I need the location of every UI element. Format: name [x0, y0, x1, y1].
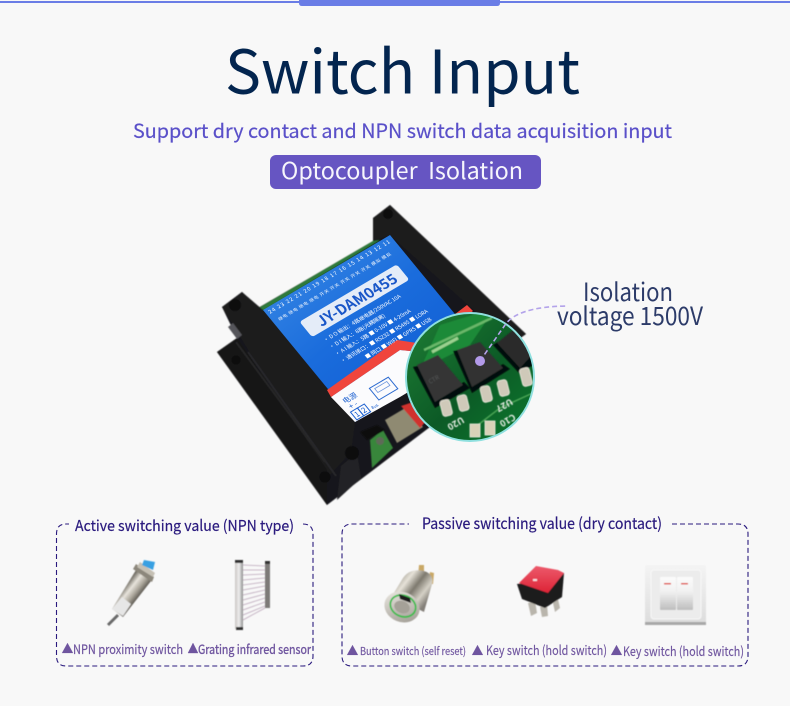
- power terminal print: 8us: [370, 403, 380, 411]
- power terminal print: 2: [359, 405, 370, 416]
- callout: isolation voltage: [557, 273, 704, 333]
- chip shadows: [413, 342, 540, 408]
- terminal number strip: 24 23 22 21 20 19 18 17 16 15 14 13 12 11: [266, 238, 392, 315]
- callout: isolation voltage: Isolation: [583, 273, 673, 309]
- channel labels: 继电 继电 继电 继电 开关 开关 开关 开关 开关 模拟 模拟: [276, 251, 393, 322]
- callout leader line: [475, 306, 566, 366]
- label printed plane: [266, 238, 448, 384]
- model name: JY-DAM0455: [312, 269, 402, 331]
- caption: button switch: Button switch (self reset): [360, 643, 466, 659]
- subtitle: Support dry contact and NPN switch data acquisition input: [133, 115, 673, 144]
- title: Switch Input: [225, 24, 580, 112]
- device terminal and connectors: [360, 402, 427, 468]
- caption: key switch 2: Key switch (hold switch): [623, 641, 744, 660]
- board silkscreen: U27: [494, 396, 515, 416]
- icon: wall switch: [645, 565, 706, 625]
- panel: passive switching value: [342, 512, 748, 666]
- specification list: • D I 输入：8路(光耦隔离): [327, 312, 387, 351]
- icon: NPN proximity switch: [108, 560, 155, 625]
- device black housing: [217, 205, 526, 505]
- product photo: JY-DAM0455 module: [217, 205, 566, 505]
- power terminal print: + -: [346, 399, 361, 412]
- callout: isolation voltage: voltage 1500V: [557, 297, 704, 333]
- specification list: • 通讯接口：■ RS232 ■ RS485 ■ LORA: [338, 307, 430, 364]
- panel heading: Passive switching value (dry contact): [422, 512, 662, 534]
- specification list: • D O 输出：4路继电器/250VAC 10A: [321, 292, 403, 344]
- icon: push button switch: [380, 565, 434, 628]
- device label: [263, 235, 500, 422]
- top accent bar: [0, 0, 790, 6]
- optocoupler chips: CTR: [426, 372, 441, 386]
- board silkscreen: [447, 398, 516, 430]
- board silkscreen: C10: [497, 411, 518, 430]
- specification list: • A I 输入：5路 ■ 0-10V ■ 4-20mA: [333, 307, 413, 358]
- specification list: [321, 286, 436, 371]
- board silkscreen: U20: [445, 414, 467, 434]
- icon: red rocker switch: [517, 566, 564, 617]
- power terminal print: [339, 372, 402, 421]
- icon: grating infrared sensor: [235, 560, 270, 630]
- magnifier: optocoupler close-up: [406, 308, 540, 441]
- model plate: [299, 264, 409, 337]
- specification list: ■ 网口 ■ WIFI ■ GPRS ■ USB: [363, 315, 434, 360]
- caption: NPN proximity switch: NPN proximity switch: [73, 639, 183, 658]
- caption: key switch 1: Key switch (hold switch): [486, 640, 607, 659]
- panel heading: Active switching value (NPN type): [75, 515, 294, 536]
- solder pads: [439, 367, 533, 437]
- panel: active switching value: [56, 515, 313, 666]
- power terminal print: 电源: [340, 390, 360, 406]
- power terminal print: 1: [352, 409, 363, 420]
- badge: optocoupler isolation: Optocoupler Isolation: [281, 152, 523, 186]
- caption: grating infrared sensor: Grating infrared sensor: [198, 639, 312, 658]
